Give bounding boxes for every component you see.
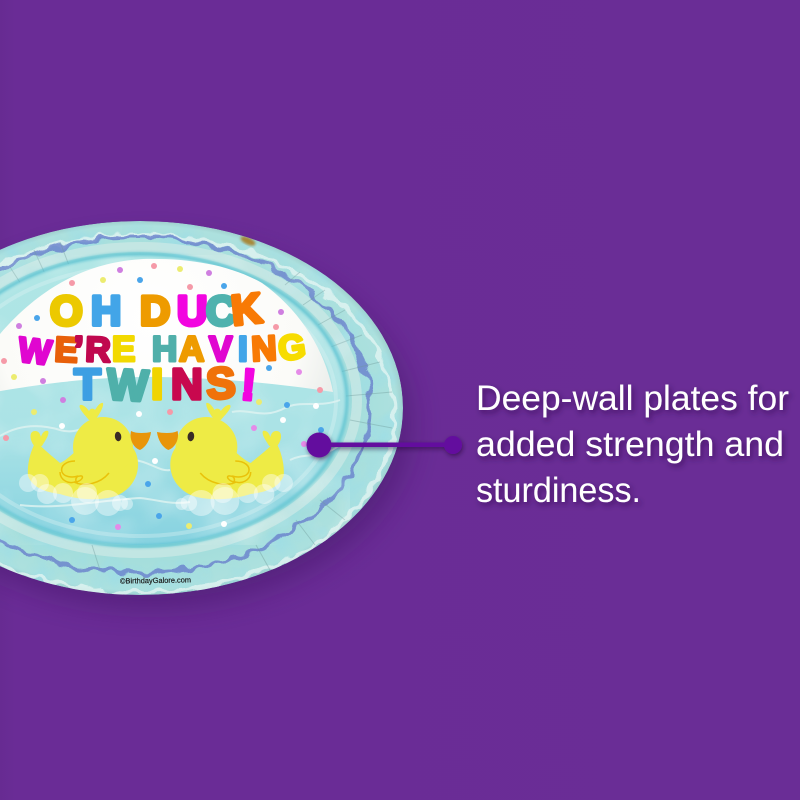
right duck [157, 403, 293, 516]
confetti dots [1, 263, 324, 530]
rim pleats [10, 242, 392, 570]
headline: we're having: WE’RE HAVING [16, 327, 308, 373]
plate shadow [0, 240, 412, 608]
plate anchor dot [306, 432, 332, 458]
teal ring [0, 254, 347, 546]
rim mottling [0, 215, 410, 600]
callout text: Deep-wall plates for [476, 379, 789, 418]
plate illustration [0, 215, 410, 600]
plate rim [0, 221, 403, 595]
inner wall band [0, 247, 357, 553]
callout text: sturdiness. [476, 471, 641, 510]
copyright text: ©BirthdayGalore.com [120, 575, 191, 586]
scorch mark [239, 234, 257, 248]
plate well [0, 255, 346, 545]
headline: oh duck: OH DUCK [50, 284, 264, 334]
callout text: added strength and [476, 425, 784, 464]
left duck [19, 403, 151, 516]
headline: twins: TWINS! [74, 359, 258, 411]
infographic canvas [0, 221, 792, 614]
water lines [0, 400, 340, 506]
rim blue wave [0, 237, 370, 573]
white dome behind title [0, 259, 333, 392]
connector line [319, 442, 453, 447]
well mottling [0, 255, 350, 545]
rim outer white wave [0, 235, 394, 593]
callout connector [306, 432, 462, 458]
white ring [0, 266, 336, 536]
text anchor dot [444, 436, 462, 454]
callout text [476, 379, 789, 510]
